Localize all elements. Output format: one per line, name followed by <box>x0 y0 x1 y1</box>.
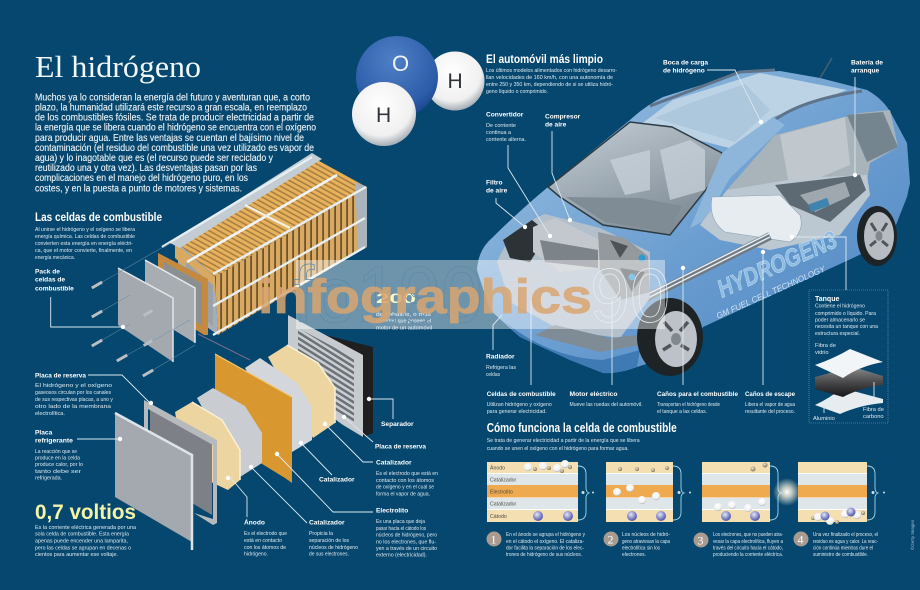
callout: radiador: Radiador <box>486 354 515 360</box>
watermark: 90 <box>590 254 670 339</box>
callout: catalizador cathode side: Es el electrodo que está en <box>376 471 438 477</box>
step 1 text: en el cátodo el oxígeno. El cataliza- <box>506 539 584 545</box>
callout: 0,7 voltios: cientos para aumentar ese voltaje. <box>35 552 118 558</box>
callout: 200 hidden under watermark: de caballos, o más <box>376 312 431 318</box>
step 2 text: electrolítica sin los <box>622 546 660 552</box>
heading: fuel cells: Las celdas de combustible <box>35 212 162 224</box>
step 3 text: 3 <box>698 534 704 548</box>
callout: placa de reserva: Placa de reserva <box>35 372 86 380</box>
fuel pipes <box>640 233 770 302</box>
callout: electrolito: pasar hacia el cátodo los <box>376 526 426 532</box>
callout: filtro de aire <box>486 180 527 229</box>
rear wheel <box>857 206 897 266</box>
step 1 text: trones de hidrógeno de sus núcleos. <box>506 552 582 558</box>
seats seen through windshield <box>610 140 705 200</box>
callout: placa refrigerante: tanto debe ser <box>35 469 81 475</box>
title: El hidrógeno <box>35 49 201 84</box>
callout: catalizador middle <box>299 441 355 484</box>
text: fuel cells description: Al unirse el hidrógeno y el oxígeno se libera <box>35 227 136 233</box>
panel: tank: Tanque <box>815 296 839 303</box>
callout: 0,7 voltios: 0,7 voltios <box>35 501 136 524</box>
step 2 text: 2 <box>608 532 614 546</box>
callout: placa de reserva: gaseosos circulan por los canales <box>35 390 111 396</box>
text: fuel cells description: ca, que el motor convierte, finalmente, en <box>35 248 132 254</box>
callout: electrolito: núcleos de hidrógeno, pero <box>376 532 437 538</box>
door pillar <box>690 117 785 228</box>
illustration: fuel cell stack <box>162 153 367 335</box>
intro text block: reutilizado una y otra vez). Las desventajas pasan por las <box>35 163 257 174</box>
illustration: end plates and bolts <box>91 243 250 377</box>
panel: step 1 diagram: Electrolito <box>490 490 513 496</box>
callout: celdas de combustible: Utilizan hidrógeno y oxígeno <box>487 402 552 408</box>
callout: boca de carga: Boca de carga <box>663 60 708 66</box>
step 1 text <box>486 532 585 558</box>
callout: placa refrigerante <box>35 430 122 482</box>
watermark: infographics <box>258 271 592 324</box>
side window area <box>727 110 898 200</box>
callout: electrolito <box>275 452 437 558</box>
panel: step 1 diagram: Ánodo <box>490 464 505 472</box>
callout: boca de carga: de hidrógeno <box>663 68 705 74</box>
panel: step 1 diagram <box>487 460 594 522</box>
callout: catalizador cathode side: Catalizador <box>376 460 412 466</box>
callout: placa de reserva: otro lado de la membrana <box>35 404 112 410</box>
image credit: ©Getty Images <box>909 519 915 550</box>
step 3 text <box>694 532 784 558</box>
callout: 0,7 voltios: Es la corriente eléctrica generada por una <box>35 525 137 531</box>
callout: placa refrigerante: refrigerante <box>35 438 73 444</box>
step 4 text: suministro de combustible. <box>813 552 868 558</box>
callout: motor eléctrico: Mueve las ruedas del automóvil. <box>570 402 643 408</box>
callout: placa de reserva right <box>342 415 426 450</box>
front wheel <box>637 298 703 376</box>
callout: batería de arranque: Batería de <box>851 60 883 66</box>
callout: electrolito: externo (electricidad). <box>376 552 427 558</box>
step 3 text: produciendo la corriente eléctrica. <box>713 552 783 558</box>
callout: convertidor: De corriente <box>486 123 516 129</box>
callout: convertidor: Convertidor <box>486 112 524 118</box>
callout: convertidor: corriente alterna. <box>486 137 526 143</box>
callout: 0,7 voltios: sola celda de combustible. Esta energía <box>35 532 130 538</box>
callout: radiador <box>486 315 516 378</box>
callout: separador: Separador <box>381 421 414 428</box>
callout: filtro de aire: Filtro <box>486 180 502 186</box>
intro text block: plazo, la humanidad utilizará este recurso a gran escala, en reemplazo <box>35 102 307 114</box>
callout: pack de celdas de combustible: celdas de <box>35 276 65 284</box>
callout: catalizador cathode side: de oxígeno y en el cual se <box>376 484 434 490</box>
callout: convertidor: continua a <box>486 130 512 136</box>
intro text block: la energía que se libera cuando el hidrógeno se encuentra con el oxígeno <box>35 123 316 134</box>
callout: ánodo: Ánodo <box>244 518 265 526</box>
panel: step 1 diagram: Cátodo <box>490 514 507 520</box>
callout: catalizador cathode side <box>323 422 438 498</box>
panel: tank: vidrio <box>815 350 829 356</box>
icon: water molecule: H <box>376 104 391 127</box>
callout: compresor de aire: Compresor <box>545 114 581 120</box>
callout: caños de escape: Caños de escape <box>745 391 795 398</box>
callout: ánodo: Es el electrodo que <box>244 531 287 537</box>
panel: tank: estructura especial. <box>815 331 860 337</box>
panel: tank: Fibra de <box>815 343 836 349</box>
callout: catalizador anode side: de sus electrones. <box>309 552 349 558</box>
illustration: hydrogen car <box>477 58 910 376</box>
watermark: fo190 <box>293 250 483 339</box>
callout: separador <box>367 397 414 428</box>
panel: tank: Aluminio <box>813 416 835 422</box>
illustration: hydrogen car: GM FUEL CELL TECHNOLOGY <box>715 263 828 321</box>
callout: catalizador anode side: separación de los <box>309 538 349 544</box>
panel: step 1 diagram: Catalizador <box>490 502 517 508</box>
text: cleanest car description: entre 250 y 350 km, dependiendo de si se utiliza hidró- <box>486 82 613 88</box>
callout: 200 hidden under watermark: 200 <box>376 290 416 306</box>
text: cleanest car description: Los últimos modelos alimentados con hidrógeno desarro- <box>486 68 617 74</box>
text: how the cell works description: cuando se unen el oxígeno con el hidrógeno para formar agua. <box>487 446 629 452</box>
illustration: exploded cell layers <box>115 315 373 550</box>
callout: electrolito: yen a través de un circuito <box>376 546 437 552</box>
callout: 200 hidden under watermark: cantidad que poseen el <box>376 318 431 324</box>
text: fuel cells description: convierten esta energía en energía eléctri- <box>35 241 133 247</box>
callout: 0,7 voltios <box>35 501 137 558</box>
callout: 0,7 voltios: apenas puede encender una lamparita, <box>35 538 128 544</box>
callout: celdas de combustible: para generar electricidad. <box>487 409 547 415</box>
intro text block: agua) y lo inagotable que es (el recurso puede ser reciclado y <box>35 153 274 164</box>
callout: catalizador anode side <box>249 465 358 558</box>
callout: batería de arranque: arranque <box>851 68 880 74</box>
hydrogen tank <box>711 195 801 242</box>
panel: tank: Contiene el hidrógeno <box>815 304 865 310</box>
callout: motor eléctrico: Motor eléctrico <box>570 391 618 398</box>
callout: boca de carga <box>663 60 763 124</box>
text: fuel cells description: energía mecánica. <box>35 255 75 261</box>
callout: compresor de aire <box>545 114 581 222</box>
callout: caños de escape: resultante del proceso. <box>745 409 795 415</box>
step 1 text: dor facilita la separación de los elec- <box>506 546 584 552</box>
intro text block: costes, y en la puesta a punto de motores y sistemas. <box>35 184 242 194</box>
text: cleanest car description: geno líquido o comprimido. <box>486 89 548 95</box>
roof glass panel <box>640 73 847 150</box>
step 4 text: ción continúa mientras dure el <box>813 546 873 552</box>
panel: tank: carbono <box>863 414 884 420</box>
callout: catalizador middle: Catalizador <box>319 476 355 484</box>
step 4 text: 4 <box>798 532 804 546</box>
icon: water molecule <box>352 36 484 146</box>
callout: convertidor <box>486 112 552 238</box>
panel: step 2 diagram <box>606 462 691 522</box>
callout: pack de celdas de combustible: combustible <box>35 286 74 292</box>
callout: 200 hidden under watermark: motor de un automóvil <box>376 326 432 332</box>
antenna <box>820 58 832 78</box>
step 4 text: Una vez finalizado el proceso, el <box>813 532 878 538</box>
intro text block: complicaciones en el manejo del hidrógeno puro, en los <box>35 173 248 184</box>
callout: electrolito: Es una placa que deja <box>376 519 426 525</box>
panel: step 1 diagram: Catalizador <box>490 478 517 484</box>
front bumper <box>505 322 640 373</box>
callout: caños de escape: Libera el vapor de agua <box>745 402 796 408</box>
panel: tank <box>790 235 888 423</box>
callout: catalizador anode side: Catalizador <box>309 520 345 526</box>
intro text block: Muchos ya lo consideran la energía del futuro y aventuran que, a corto <box>35 92 310 104</box>
front grille <box>535 325 640 352</box>
step 1 text: 1 <box>490 532 496 546</box>
callout: radiador: Refrigera las <box>486 365 516 371</box>
step 1 text: En el ánodo se agrupa el hidrógeno y <box>506 532 585 538</box>
step 2 text: geno atraviesan la capa <box>622 539 671 545</box>
callout: celdas de combustible: Celdas de combustible <box>487 391 556 398</box>
callout: caños para el combustible: Caños para el combustible <box>657 391 738 398</box>
callout: catalizador cathode side: contacto con los átomos <box>376 478 434 484</box>
callout: placa refrigerante: Placa <box>35 430 53 436</box>
callout: motor eléctrico <box>570 300 643 408</box>
air filter <box>503 220 548 262</box>
callout: batería de arranque <box>851 60 883 177</box>
callout: 0,7 voltios: pero las celdas se agrupan en decenas o <box>35 546 131 552</box>
panel: tank: necesita un tanque con una <box>815 324 879 330</box>
callout: placa refrigerante: produce calor, por lo <box>35 462 83 468</box>
step 2 text: electrones. <box>622 552 646 558</box>
callout: catalizador anode side: núcleos de hidrógeno <box>309 545 358 551</box>
callout: electrolito: Electrolito <box>376 508 408 514</box>
callout: catalizador anode side: Propicia la <box>309 531 334 537</box>
panel: tank: comprimido o líquido. Para <box>815 311 877 317</box>
callout: filtro de aire: de aire <box>486 188 508 194</box>
panel: tank: Fibra de <box>863 407 884 413</box>
icon: water molecule: O <box>392 51 409 76</box>
callout: 200 hidden under watermark <box>376 290 432 332</box>
callout: caños para el combustible: el tanque a las celdas. <box>657 409 707 415</box>
callout: catalizador cathode side: forma el vapor de agua. <box>376 492 430 498</box>
step 4 text: residuo es agua y calor. La reac- <box>813 539 878 545</box>
callout: caños para el combustible: Transportan el hidrógeno desde <box>657 402 720 408</box>
callout: placa de reserva: electrolítica. <box>35 411 65 417</box>
callout: placa refrigerante: La reacción que se <box>35 449 77 455</box>
step 3 text: vesar la capa electrolítica, fluyen a <box>713 539 784 545</box>
door text band: HYDROGEN3 <box>713 226 841 303</box>
step 2 text: Los núcleos de hidró- <box>622 532 670 538</box>
callout: placa de reserva right: Placa de reserva <box>375 444 426 450</box>
text: how the cell works description <box>487 438 640 452</box>
step 4 text <box>794 532 878 558</box>
callout: caños para el combustible <box>657 266 738 415</box>
windshield <box>548 122 722 235</box>
step 2 text <box>604 532 671 558</box>
step 3 text: través del circuito hacia el cátodo, <box>713 546 783 552</box>
text: fuel cells description <box>35 227 136 261</box>
text: fuel cells description: energía química. Las celdas de combustible <box>35 234 135 240</box>
callout: ánodo: con los átomos de <box>244 545 286 551</box>
callout: placa refrigerante: refrigerada. <box>35 476 62 482</box>
intro text block <box>35 92 316 194</box>
callout: ánodo: hidrógeno. <box>244 552 268 558</box>
callout: compresor de aire: de aire <box>545 122 567 128</box>
callout: placa refrigerante: produce en la celda <box>35 456 81 462</box>
callout: caños de escape <box>745 250 796 415</box>
callout: ánodo <box>226 476 287 558</box>
roof rails <box>650 70 862 122</box>
callout: celdas de combustible <box>487 300 556 415</box>
callout: ánodo: está en contacto <box>244 538 282 544</box>
callout: placa de reserva: de sus respectivas placas, a uno y <box>35 397 113 403</box>
fuel cell box <box>533 218 600 272</box>
callout: electrolito: no los electrones, que flu- <box>376 540 436 546</box>
intro text block: de los combustibles fósiles. Se trata de producir electricidad a partir de <box>35 113 314 124</box>
callout: placa de reserva: El hidrógeno y el oxígeno <box>35 383 112 389</box>
callout: radiador: celdas <box>486 372 500 378</box>
engine bay <box>497 214 650 338</box>
watermark <box>258 250 670 339</box>
text: cleanest car description: llan velocidades de 160 km/h, con una autonomía de <box>486 75 613 81</box>
panel: step 4 diagram <box>798 462 885 525</box>
text: cleanest car description <box>486 68 617 95</box>
interior <box>700 175 870 250</box>
panel: step 3 diagram <box>702 462 801 522</box>
text: how the cell works description: Se trata de generar electricidad a partir de la energía que se libera <box>487 438 640 444</box>
callout: pack de celdas de combustible <box>35 268 125 329</box>
step 3 text: Los electrones, que no pueden atra- <box>713 532 783 538</box>
intro text block: para producir agua. Entre las ventajas se cuentan el bajísimo nivel de <box>35 133 304 144</box>
callout: pack de celdas de combustible: Pack de <box>35 268 60 276</box>
callout: placa de reserva <box>35 372 153 417</box>
heading: cleanest car: El automóvil más limpio <box>486 54 603 66</box>
heading: how the cell works: Cómo funciona la celda de combustible <box>487 421 677 435</box>
panel: tank: poder almacenarlo se <box>815 318 865 324</box>
intro text block: contaminación (el residuo del combustible una vez utilizado es vapor de <box>35 143 314 154</box>
car body <box>477 71 910 373</box>
icon: water molecule: H <box>448 70 463 93</box>
rear machinery <box>775 175 866 222</box>
engine detail <box>598 232 650 300</box>
